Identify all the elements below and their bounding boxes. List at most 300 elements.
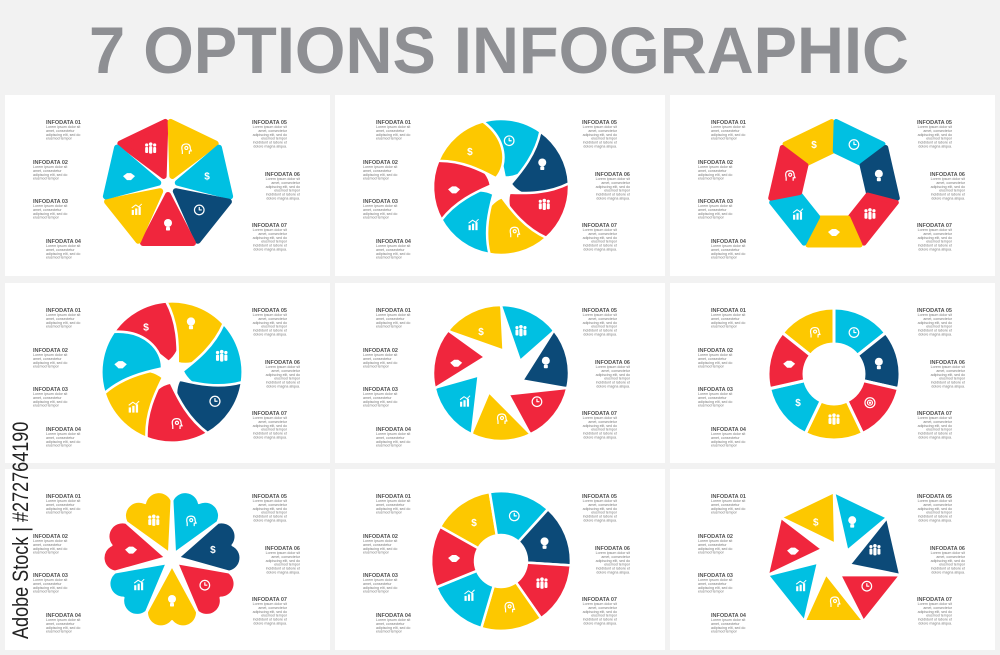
text labels panel 2: eiusmod tempor xyxy=(591,240,618,244)
text labels panel 9: Lorem ipsum dolor sit xyxy=(931,551,965,555)
text labels panel 4: INFODATA 05 xyxy=(252,308,287,314)
text labels panel 5: eiusmod tempor xyxy=(591,428,618,432)
text labels panel 4: incididunt ut labore et xyxy=(253,432,287,436)
text labels panel 2: INFODATA 07 xyxy=(582,223,617,229)
text labels panel 5: incididunt ut labore et xyxy=(583,329,617,333)
text labels panel 3: Lorem ipsum dolor sit xyxy=(918,228,952,232)
text labels panel 6: amet, consectetur xyxy=(923,317,953,321)
text labels panel 7: amet, consectetur xyxy=(271,555,301,559)
text labels panel 9: dolore magna aliqua. xyxy=(918,518,952,522)
text labels panel 9: Lorem ipsum dolor sit xyxy=(918,499,952,503)
text labels panel 2: amet, consectetur xyxy=(376,129,405,133)
text labels panel 6: INFODATA 02 xyxy=(698,348,733,354)
text labels panel 1: adipiscing elit, sed do xyxy=(33,212,67,216)
text labels panel 8: Lorem ipsum dolor sit xyxy=(583,499,617,503)
text labels panel 1: amet, consectetur xyxy=(258,232,288,236)
text labels panel 6: INFODATA 05 xyxy=(917,308,952,314)
text labels panel 4: adipiscing elit, sed do xyxy=(33,361,67,365)
chart panel 6: $ xyxy=(795,398,801,409)
text labels panel 1: incididunt ut labore et xyxy=(253,244,287,248)
text labels panel 5: amet, consectetur xyxy=(376,317,405,321)
text labels panel 8: incididunt ut labore et xyxy=(583,515,617,519)
text labels panel 4: INFODATA 04 xyxy=(46,427,82,433)
text labels panel 1 xyxy=(33,120,301,260)
text labels panel 4: dolore magna aliqua. xyxy=(266,384,300,388)
text labels panel 8: incididunt ut labore et xyxy=(583,618,617,622)
text labels panel 2: eiusmod tempor xyxy=(363,177,390,181)
text labels panel 4: dolore magna aliqua. xyxy=(253,436,287,440)
text labels panel 2: amet, consectetur xyxy=(588,232,618,236)
text labels panel 9 xyxy=(698,494,966,634)
text labels panel 4: eiusmod tempor xyxy=(261,325,288,329)
text labels panel 6: dolore magna aliqua. xyxy=(918,436,952,440)
text labels panel 1: Lorem ipsum dolor sit xyxy=(46,125,80,129)
text labels panel 4: eiusmod tempor xyxy=(261,428,288,432)
text labels panel 5: dolore magna aliqua. xyxy=(583,332,617,336)
text labels panel 8: amet, consectetur xyxy=(601,555,631,559)
text labels panel 4: eiusmod tempor xyxy=(274,377,301,381)
text labels panel 7: eiusmod tempor xyxy=(33,551,60,555)
text labels panel 4: adipiscing elit, sed do xyxy=(253,321,287,325)
text labels panel 3: incididunt ut labore et xyxy=(931,193,965,197)
text labels panel 8: amet, consectetur xyxy=(588,606,618,610)
text labels panel 8: adipiscing elit, sed do xyxy=(376,507,410,511)
text labels panel 9: eiusmod tempor xyxy=(698,590,725,594)
text labels panel 4: amet, consectetur xyxy=(33,357,62,361)
panel 3: heptagon ring xyxy=(670,95,995,276)
text labels panel 4: amet, consectetur xyxy=(33,396,62,400)
text labels panel 9: incididunt ut labore et xyxy=(931,567,965,571)
text labels panel 4: eiusmod tempor xyxy=(33,404,60,408)
text labels panel 1: dolore magna aliqua. xyxy=(266,196,300,200)
text labels panel 5: Lorem ipsum dolor sit xyxy=(583,313,617,317)
text labels panel 1: dolore magna aliqua. xyxy=(253,248,287,252)
text labels panel 2: amet, consectetur xyxy=(376,248,405,252)
text labels panel 6 xyxy=(698,308,966,448)
text labels panel 3: amet, consectetur xyxy=(711,248,740,252)
text labels panel 7: amet, consectetur xyxy=(33,582,62,586)
text labels panel 3: INFODATA 01 xyxy=(711,120,746,126)
text labels panel 8: amet, consectetur xyxy=(363,582,392,586)
text labels panel 9: amet, consectetur xyxy=(711,503,740,507)
text labels panel 7: eiusmod tempor xyxy=(274,563,301,567)
text labels panel 2: INFODATA 05 xyxy=(582,120,617,126)
panel 7: flower petals xyxy=(5,469,330,650)
text labels panel 8: eiusmod tempor xyxy=(376,630,403,634)
text labels panel 9: eiusmod tempor xyxy=(698,551,725,555)
text labels panel 1: eiusmod tempor xyxy=(33,177,60,181)
text labels panel 9: adipiscing elit, sed do xyxy=(698,547,732,551)
text labels panel 3: Lorem ipsum dolor sit xyxy=(931,177,965,181)
text labels panel 5: adipiscing elit, sed do xyxy=(583,424,617,428)
text labels panel 4: amet, consectetur xyxy=(46,317,75,321)
text labels panel 1: amet, consectetur xyxy=(33,169,62,173)
text labels panel 3: eiusmod tempor xyxy=(711,256,738,260)
text labels panel 6: eiusmod tempor xyxy=(926,325,953,329)
text labels panel 3: eiusmod tempor xyxy=(698,177,725,181)
text labels panel 1: adipiscing elit, sed do xyxy=(46,252,80,256)
title: 7 OPTIONS INFOGRAPHIC xyxy=(89,13,909,87)
text labels panel 3: eiusmod tempor xyxy=(926,137,953,141)
text labels panel 3: adipiscing elit, sed do xyxy=(698,212,732,216)
text labels panel 7: INFODATA 03 xyxy=(33,573,68,579)
text labels panel 1: INFODATA 03 xyxy=(33,199,68,205)
text labels panel 1: INFODATA 04 xyxy=(46,239,82,245)
text labels panel 5: eiusmod tempor xyxy=(376,325,403,329)
text labels panel 1: adipiscing elit, sed do xyxy=(253,133,287,137)
text labels panel 7: dolore magna aliqua. xyxy=(253,622,287,626)
text labels panel 8: INFODATA 06 xyxy=(595,546,630,552)
text labels panel 6: amet, consectetur xyxy=(698,357,727,361)
chart panel 2: $ xyxy=(467,147,473,158)
text labels panel 1: eiusmod tempor xyxy=(261,240,288,244)
text labels panel 8 xyxy=(363,494,631,634)
text labels panel 5: Lorem ipsum dolor sit xyxy=(583,416,617,420)
text labels panel 8: INFODATA 04 xyxy=(376,613,412,619)
text labels panel 9: amet, consectetur xyxy=(923,503,953,507)
text labels panel 5: Lorem ipsum dolor sit xyxy=(363,353,397,357)
text labels panel 9: amet, consectetur xyxy=(698,582,727,586)
text labels panel 2: eiusmod tempor xyxy=(376,137,403,141)
text labels panel 8: INFODATA 03 xyxy=(363,573,398,579)
text labels panel 4: incididunt ut labore et xyxy=(253,329,287,333)
text labels panel 4: adipiscing elit, sed do xyxy=(266,373,300,377)
text labels panel 7: INFODATA 07 xyxy=(252,597,287,603)
text labels panel 7: Lorem ipsum dolor sit xyxy=(46,618,80,622)
text labels panel 9: INFODATA 06 xyxy=(930,546,965,552)
text labels panel 8: amet, consectetur xyxy=(363,543,392,547)
text labels panel 7: eiusmod tempor xyxy=(261,511,288,515)
text labels panel 8: incididunt ut labore et xyxy=(596,567,630,571)
text labels panel 8: adipiscing elit, sed do xyxy=(363,586,397,590)
text labels panel 6: amet, consectetur xyxy=(711,436,740,440)
text labels panel 9: Lorem ipsum dolor sit xyxy=(698,578,732,582)
text labels panel 3: adipiscing elit, sed do xyxy=(711,252,745,256)
text labels panel 8: Lorem ipsum dolor sit xyxy=(583,602,617,606)
text labels panel 6: eiusmod tempor xyxy=(711,325,738,329)
text labels panel 3: eiusmod tempor xyxy=(711,137,738,141)
text labels panel 3: adipiscing elit, sed do xyxy=(918,236,952,240)
text labels panel 6: INFODATA 07 xyxy=(917,411,952,417)
text labels panel 6: Lorem ipsum dolor sit xyxy=(698,353,732,357)
text labels panel 6: eiusmod tempor xyxy=(926,428,953,432)
text labels panel 3: dolore magna aliqua. xyxy=(931,196,965,200)
text labels panel 5: eiusmod tempor xyxy=(376,444,403,448)
text labels panel 9: INFODATA 01 xyxy=(711,494,746,500)
text labels panel 1: eiusmod tempor xyxy=(261,137,288,141)
text labels panel 9: dolore magna aliqua. xyxy=(918,622,952,626)
text labels panel 4: dolore magna aliqua. xyxy=(253,332,287,336)
text labels panel 6: Lorem ipsum dolor sit xyxy=(711,432,745,436)
text labels panel 7: INFODATA 06 xyxy=(265,546,300,552)
text labels panel 5: amet, consectetur xyxy=(363,357,392,361)
text labels panel 7: amet, consectetur xyxy=(33,543,62,547)
text labels panel 4: INFODATA 06 xyxy=(265,360,300,366)
text labels panel 3: amet, consectetur xyxy=(923,232,953,236)
text labels panel 5: INFODATA 01 xyxy=(376,308,411,314)
text labels panel 9: INFODATA 04 xyxy=(711,613,747,619)
text labels panel 5: INFODATA 04 xyxy=(376,427,412,433)
chart panel 1 xyxy=(106,122,230,243)
text labels panel 5: Lorem ipsum dolor sit xyxy=(596,365,630,369)
text labels panel 4: amet, consectetur xyxy=(258,317,288,321)
text labels panel 2: dolore magna aliqua. xyxy=(596,196,630,200)
text labels panel 5: Lorem ipsum dolor sit xyxy=(376,313,410,317)
text labels panel 9: dolore magna aliqua. xyxy=(931,570,965,574)
text labels panel 7: Lorem ipsum dolor sit xyxy=(253,602,287,606)
text labels panel 2: amet, consectetur xyxy=(363,208,392,212)
text labels panel 3: adipiscing elit, sed do xyxy=(918,133,952,137)
text labels panel 3: amet, consectetur xyxy=(698,208,727,212)
text labels panel 5: INFODATA 03 xyxy=(363,387,398,393)
text labels panel 2: amet, consectetur xyxy=(363,169,392,173)
text labels panel 5: amet, consectetur xyxy=(601,369,631,373)
text labels panel 8: eiusmod tempor xyxy=(591,614,618,618)
text labels panel 9: incididunt ut labore et xyxy=(918,515,952,519)
text labels panel 3: Lorem ipsum dolor sit xyxy=(698,204,732,208)
chart panel 7: $ xyxy=(210,545,216,556)
text labels panel 9: eiusmod tempor xyxy=(939,563,966,567)
text labels panel 3: amet, consectetur xyxy=(711,129,740,133)
text labels panel 1: INFODATA 05 xyxy=(252,120,287,126)
text labels panel 1: eiusmod tempor xyxy=(46,137,73,141)
text labels panel 7: adipiscing elit, sed do xyxy=(33,586,67,590)
text labels panel 4: INFODATA 03 xyxy=(33,387,68,393)
text labels panel 5 xyxy=(363,308,631,448)
text labels panel 7: incididunt ut labore et xyxy=(253,515,287,519)
text labels panel 8: amet, consectetur xyxy=(376,622,405,626)
text labels panel 7: adipiscing elit, sed do xyxy=(46,626,80,630)
text labels panel 9: adipiscing elit, sed do xyxy=(918,610,952,614)
panel 1: heptagon triangles xyxy=(5,95,330,276)
chart panel 5 xyxy=(428,299,574,441)
text labels panel 1: amet, consectetur xyxy=(46,248,75,252)
text labels panel 2: eiusmod tempor xyxy=(376,256,403,260)
text labels panel 6: adipiscing elit, sed do xyxy=(711,321,745,325)
text labels panel 9: adipiscing elit, sed do xyxy=(711,507,745,511)
text labels panel 1: amet, consectetur xyxy=(33,208,62,212)
panel 9: heptagon shutter xyxy=(670,469,995,650)
text labels panel 9: INFODATA 05 xyxy=(917,494,952,500)
text labels panel 7: amet, consectetur xyxy=(46,622,75,626)
text labels panel 1: adipiscing elit, sed do xyxy=(253,236,287,240)
text labels panel 6: adipiscing elit, sed do xyxy=(698,400,732,404)
text labels panel 5: amet, consectetur xyxy=(376,436,405,440)
text labels panel 9: adipiscing elit, sed do xyxy=(711,626,745,630)
text labels panel 3: amet, consectetur xyxy=(936,181,966,185)
chart panel 9: $ xyxy=(813,518,819,529)
text labels panel 6: INFODATA 04 xyxy=(711,427,747,433)
text labels panel 1: amet, consectetur xyxy=(271,181,301,185)
text labels panel 6: eiusmod tempor xyxy=(711,444,738,448)
text labels panel 3: amet, consectetur xyxy=(698,169,727,173)
chart panel 7 xyxy=(101,487,243,626)
text labels panel 6: INFODATA 03 xyxy=(698,387,733,393)
text labels panel 6: amet, consectetur xyxy=(711,317,740,321)
text labels panel 2: INFODATA 04 xyxy=(376,239,412,245)
text labels panel 8: INFODATA 02 xyxy=(363,534,398,540)
text labels panel 2: adipiscing elit, sed do xyxy=(376,133,410,137)
text labels panel 2: incididunt ut labore et xyxy=(583,141,617,145)
text labels panel 7: eiusmod tempor xyxy=(46,630,73,634)
text labels panel 7: adipiscing elit, sed do xyxy=(33,547,67,551)
text labels panel 5: amet, consectetur xyxy=(363,396,392,400)
panel 6: donut sectors xyxy=(670,283,995,463)
chart panel 5: $ xyxy=(478,327,484,338)
text labels panel 2: amet, consectetur xyxy=(588,129,618,133)
text labels panel 5: adipiscing elit, sed do xyxy=(376,321,410,325)
text labels panel 6: INFODATA 06 xyxy=(930,360,965,366)
text labels panel 7 xyxy=(33,494,301,634)
text labels panel 5: adipiscing elit, sed do xyxy=(363,361,397,365)
text labels panel 6: eiusmod tempor xyxy=(698,404,725,408)
text labels panel 6: incididunt ut labore et xyxy=(918,329,952,333)
text labels panel 4: eiusmod tempor xyxy=(33,365,60,369)
text labels panel 8: Lorem ipsum dolor sit xyxy=(363,539,397,543)
text labels panel 9: amet, consectetur xyxy=(936,555,966,559)
chart panel 8: $ xyxy=(471,518,477,529)
text labels panel 5: incididunt ut labore et xyxy=(583,432,617,436)
text labels panel 5: eiusmod tempor xyxy=(604,377,631,381)
text labels panel 8: INFODATA 05 xyxy=(582,494,617,500)
text labels panel 6: INFODATA 01 xyxy=(711,308,746,314)
text labels panel 1: Lorem ipsum dolor sit xyxy=(253,228,287,232)
text labels panel 3: adipiscing elit, sed do xyxy=(698,173,732,177)
text labels panel 5: eiusmod tempor xyxy=(363,404,390,408)
text labels panel 5: INFODATA 05 xyxy=(582,308,617,314)
text labels panel 5: adipiscing elit, sed do xyxy=(596,373,630,377)
text labels panel 2: INFODATA 06 xyxy=(595,172,630,178)
text labels panel 9: INFODATA 02 xyxy=(698,534,733,540)
text labels panel 3: adipiscing elit, sed do xyxy=(931,185,965,189)
text labels panel 3: amet, consectetur xyxy=(923,129,953,133)
text labels panel 3: incididunt ut labore et xyxy=(918,141,952,145)
text labels panel 7: INFODATA 02 xyxy=(33,534,68,540)
text labels panel 6: amet, consectetur xyxy=(698,396,727,400)
text labels panel 6: adipiscing elit, sed do xyxy=(711,440,745,444)
text labels panel 6: adipiscing elit, sed do xyxy=(931,373,965,377)
text labels panel 1: eiusmod tempor xyxy=(33,216,60,220)
text labels panel 2: INFODATA 01 xyxy=(376,120,411,126)
text labels panel 6: adipiscing elit, sed do xyxy=(698,361,732,365)
text labels panel 6: incididunt ut labore et xyxy=(931,381,965,385)
text labels panel 4: adipiscing elit, sed do xyxy=(33,400,67,404)
text labels panel 2: adipiscing elit, sed do xyxy=(596,185,630,189)
text labels panel 7: adipiscing elit, sed do xyxy=(253,610,287,614)
text labels panel 4: Lorem ipsum dolor sit xyxy=(33,353,67,357)
text labels panel 1: Lorem ipsum dolor sit xyxy=(266,177,300,181)
chart panel 4: $ xyxy=(143,323,149,334)
text labels panel 6: Lorem ipsum dolor sit xyxy=(698,392,732,396)
text labels panel 5: adipiscing elit, sed do xyxy=(376,440,410,444)
text labels panel 8: Lorem ipsum dolor sit xyxy=(596,551,630,555)
text labels panel 2 xyxy=(363,120,631,260)
panel 2: swirl ring xyxy=(335,95,665,276)
text labels panel 5: INFODATA 07 xyxy=(582,411,617,417)
text labels panel 3: eiusmod tempor xyxy=(926,240,953,244)
text labels panel 1: Lorem ipsum dolor sit xyxy=(253,125,287,129)
text labels panel 4: Lorem ipsum dolor sit xyxy=(266,365,300,369)
text labels panel 6: amet, consectetur xyxy=(923,420,953,424)
text labels panel 7: eiusmod tempor xyxy=(33,590,60,594)
text labels panel 3: eiusmod tempor xyxy=(698,216,725,220)
text labels panel 6: Lorem ipsum dolor sit xyxy=(918,313,952,317)
text labels panel 6: eiusmod tempor xyxy=(939,377,966,381)
text labels panel 5: Lorem ipsum dolor sit xyxy=(376,432,410,436)
text labels panel 2: INFODATA 03 xyxy=(363,199,398,205)
text labels panel 2: Lorem ipsum dolor sit xyxy=(583,125,617,129)
text labels panel 4: incididunt ut labore et xyxy=(266,381,300,385)
text labels panel 7: Lorem ipsum dolor sit xyxy=(33,578,67,582)
text labels panel 5: adipiscing elit, sed do xyxy=(363,400,397,404)
text labels panel 1: Lorem ipsum dolor sit xyxy=(33,204,67,208)
text labels panel 4: adipiscing elit, sed do xyxy=(46,321,80,325)
text labels panel 3 xyxy=(698,120,966,260)
text labels panel 2: incididunt ut labore et xyxy=(596,193,630,197)
text labels panel 3: Lorem ipsum dolor sit xyxy=(698,165,732,169)
text labels panel 7: INFODATA 04 xyxy=(46,613,82,619)
text labels panel 2: eiusmod tempor xyxy=(363,216,390,220)
text labels panel 2: adipiscing elit, sed do xyxy=(583,236,617,240)
text labels panel 7: incididunt ut labore et xyxy=(253,618,287,622)
text labels panel 8: adipiscing elit, sed do xyxy=(583,507,617,511)
text labels panel 9: INFODATA 07 xyxy=(917,597,952,603)
text labels panel 7: Lorem ipsum dolor sit xyxy=(33,539,67,543)
text labels panel 2: adipiscing elit, sed do xyxy=(363,173,397,177)
text labels panel 4: INFODATA 07 xyxy=(252,411,287,417)
text labels panel 2: dolore magna aliqua. xyxy=(583,144,617,148)
text labels panel 5: dolore magna aliqua. xyxy=(596,384,630,388)
text labels panel 8: adipiscing elit, sed do xyxy=(583,610,617,614)
text labels panel 1: incididunt ut labore et xyxy=(266,193,300,197)
text labels panel 7: adipiscing elit, sed do xyxy=(266,559,300,563)
text labels panel 3: INFODATA 07 xyxy=(917,223,952,229)
text labels panel 8: Lorem ipsum dolor sit xyxy=(376,499,410,503)
text labels panel 6: dolore magna aliqua. xyxy=(931,384,965,388)
text labels panel 7: eiusmod tempor xyxy=(46,511,73,515)
text labels panel 2: Lorem ipsum dolor sit xyxy=(596,177,630,181)
text labels panel 4: Lorem ipsum dolor sit xyxy=(46,313,80,317)
text labels panel 8: eiusmod tempor xyxy=(376,511,403,515)
text labels panel 2: incididunt ut labore et xyxy=(583,244,617,248)
text labels panel 9: eiusmod tempor xyxy=(926,511,953,515)
text labels panel 4: Lorem ipsum dolor sit xyxy=(253,416,287,420)
text labels panel 2: Lorem ipsum dolor sit xyxy=(363,165,397,169)
text labels panel 9: adipiscing elit, sed do xyxy=(918,507,952,511)
text labels panel 7: amet, consectetur xyxy=(258,503,288,507)
text labels panel 8: eiusmod tempor xyxy=(363,590,390,594)
text labels panel 9: Lorem ipsum dolor sit xyxy=(918,602,952,606)
text labels panel 8: Lorem ipsum dolor sit xyxy=(376,618,410,622)
text labels panel 8: INFODATA 01 xyxy=(376,494,411,500)
text labels panel 2: amet, consectetur xyxy=(601,181,631,185)
text labels panel 1: Lorem ipsum dolor sit xyxy=(33,165,67,169)
text labels panel 1: incididunt ut labore et xyxy=(253,141,287,145)
text labels panel 7: INFODATA 01 xyxy=(46,494,81,500)
text labels panel 6: dolore magna aliqua. xyxy=(918,332,952,336)
text labels panel 8: amet, consectetur xyxy=(588,503,618,507)
text labels panel 3: INFODATA 03 xyxy=(698,199,733,205)
text labels panel 2: adipiscing elit, sed do xyxy=(363,212,397,216)
text labels panel 5: eiusmod tempor xyxy=(363,365,390,369)
text labels panel 1: eiusmod tempor xyxy=(274,189,301,193)
text labels panel 9: Lorem ipsum dolor sit xyxy=(711,618,745,622)
text labels panel 2: Lorem ipsum dolor sit xyxy=(583,228,617,232)
vertical credit text: Adobe Stock | #272764190 xyxy=(8,422,33,639)
chart panel 3 xyxy=(771,122,897,245)
text labels panel 7: amet, consectetur xyxy=(258,606,288,610)
text labels panel 4 xyxy=(33,308,301,448)
